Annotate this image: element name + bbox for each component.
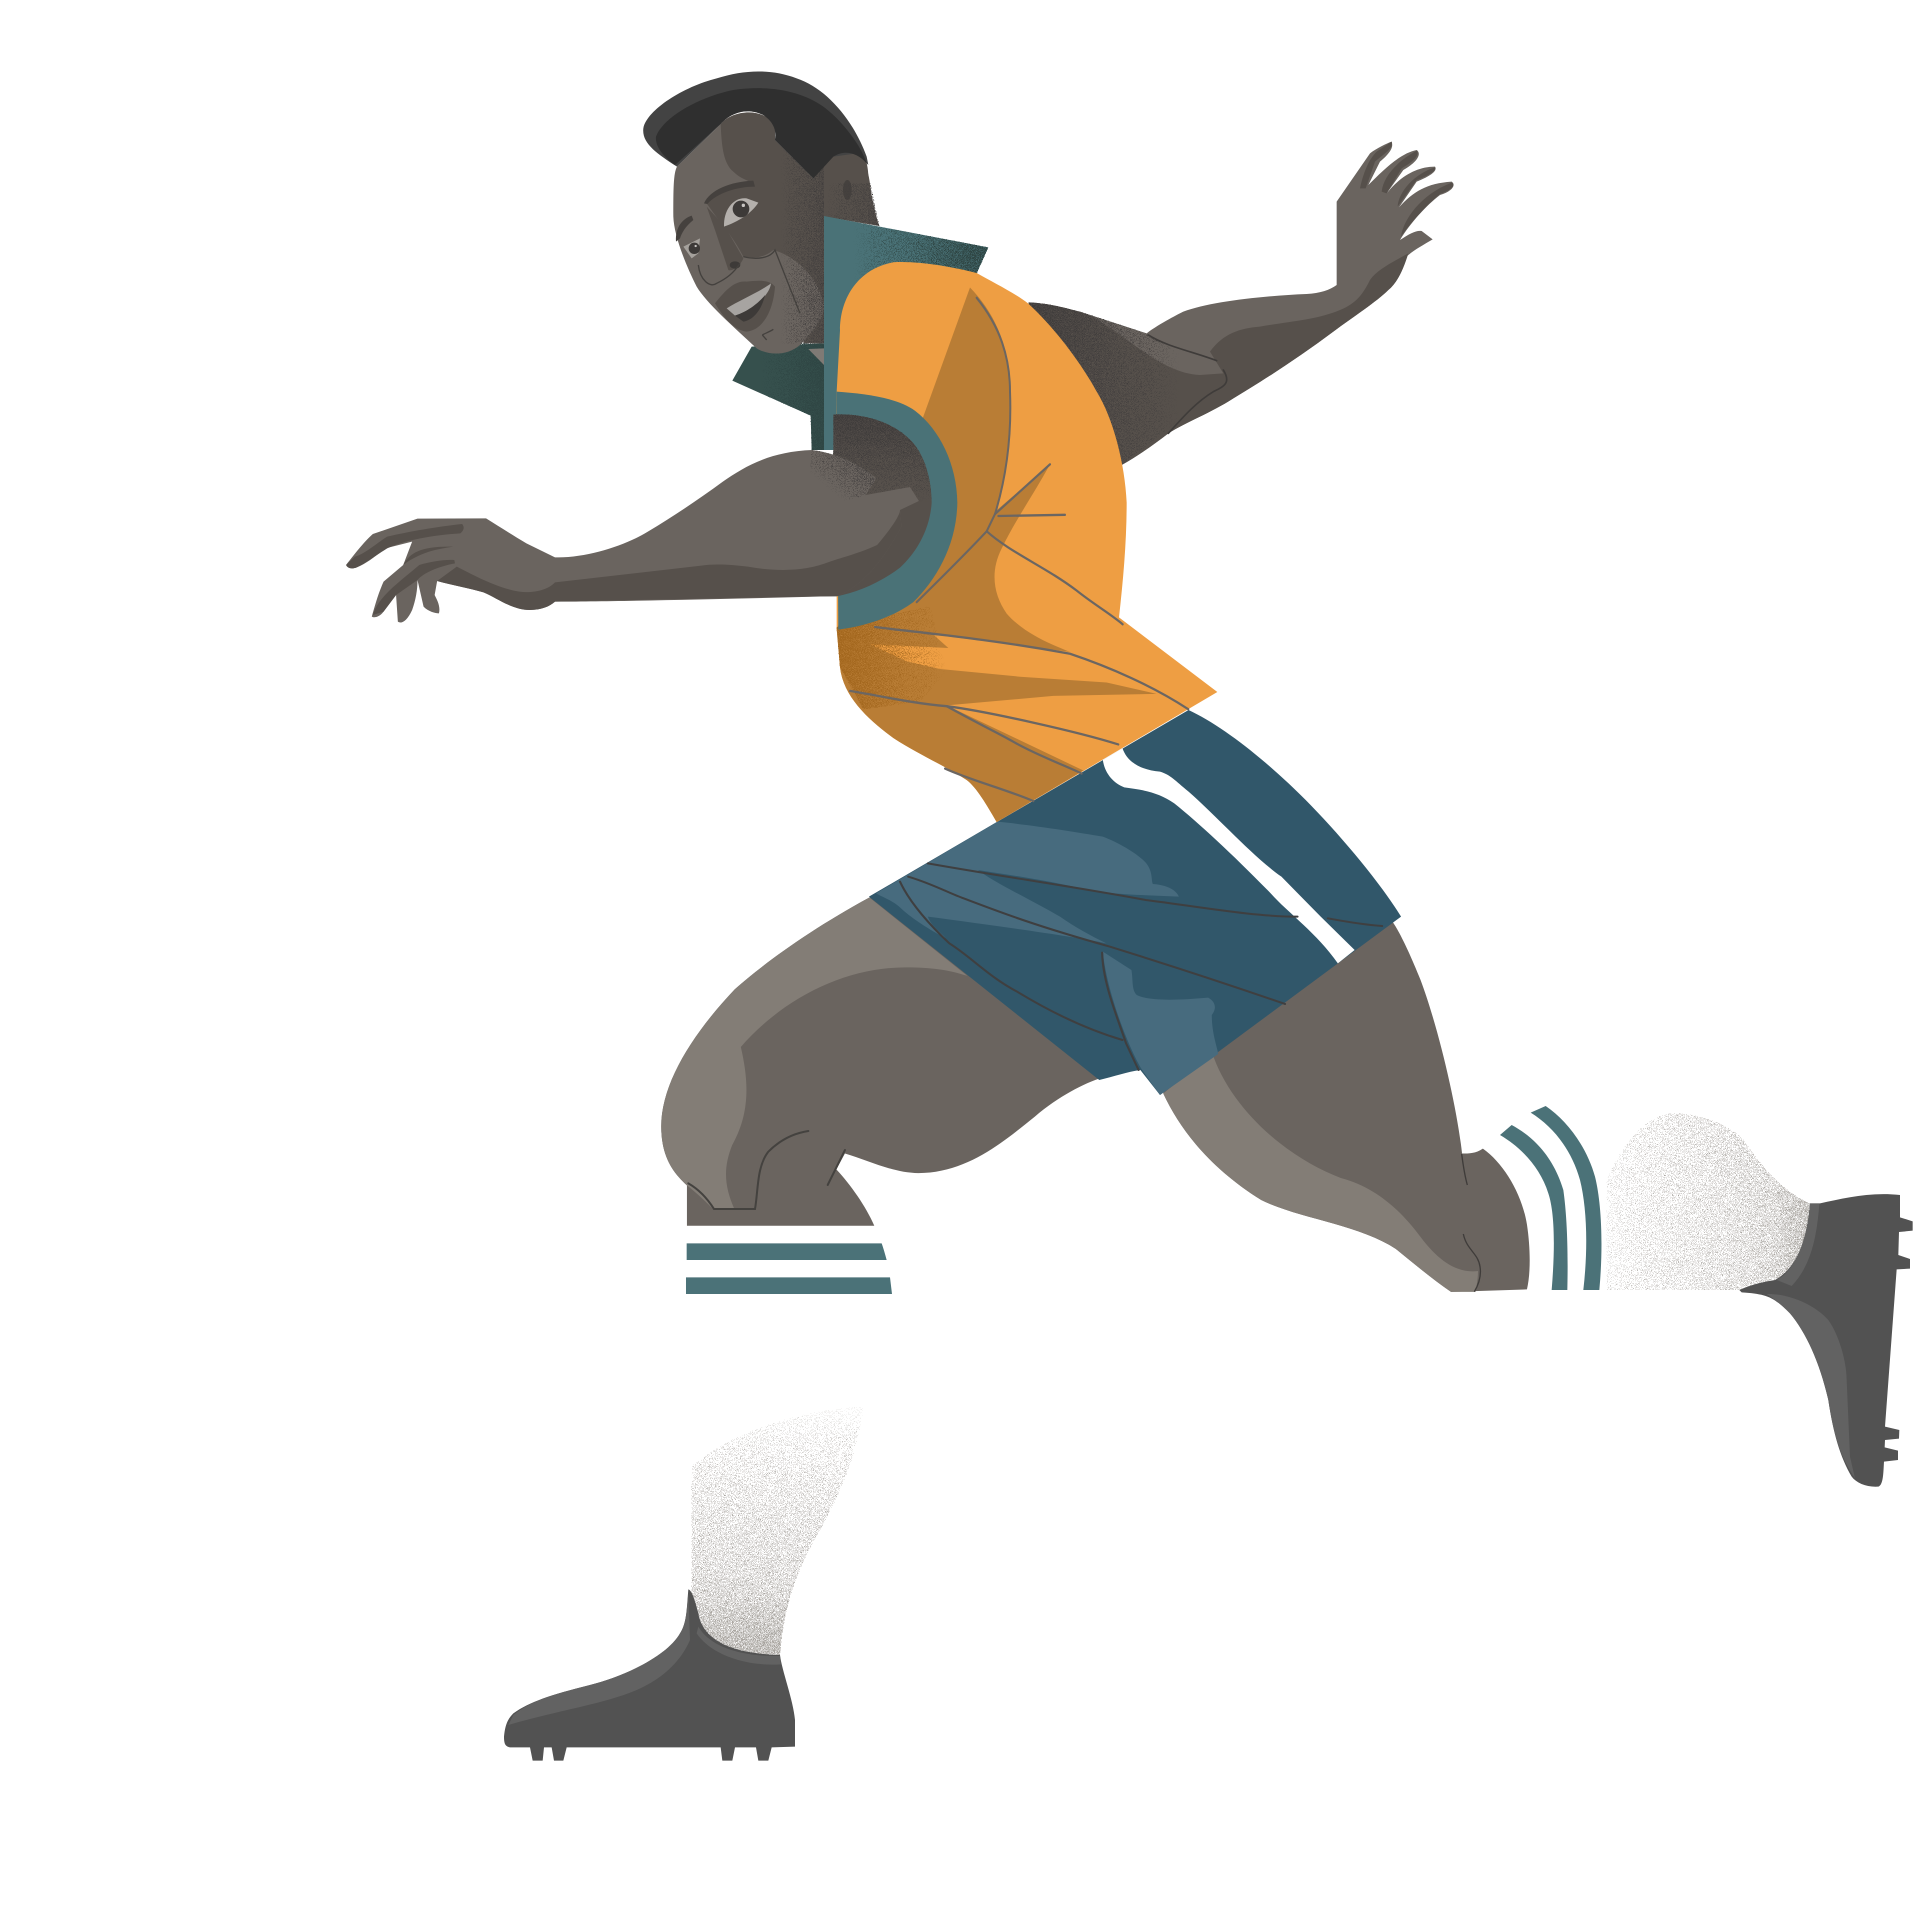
rear sock grain	[1607, 1113, 1810, 1290]
arm silhouette	[1029, 142, 1454, 487]
front sock grain	[692, 1407, 863, 1657]
left eye	[683, 238, 700, 258]
left arm reaching out	[346, 450, 919, 622]
jersey crease lines	[850, 298, 1188, 801]
neck and back of head	[803, 145, 879, 343]
teeth	[727, 283, 771, 316]
upright collar grain	[853, 222, 988, 303]
front boot highlights	[508, 1593, 781, 1725]
face	[673, 124, 824, 354]
cheek and neck grain	[780, 143, 824, 343]
left brow	[676, 216, 693, 242]
ear	[827, 152, 872, 207]
right brow	[704, 181, 755, 204]
jersey	[820, 262, 1217, 822]
shorts crease lines	[900, 863, 1382, 1070]
inner sleeve shadow	[820, 414, 932, 596]
finger shading	[346, 524, 464, 615]
front sock stripes	[686, 1243, 892, 1294]
shoulder grain	[1029, 302, 1180, 487]
front thigh	[661, 845, 1151, 1226]
shoulder grain	[809, 450, 876, 507]
sleeve crease lines	[1148, 335, 1227, 433]
head and collar	[643, 71, 988, 450]
lower collar flap	[732, 343, 824, 450]
finger shading	[1360, 142, 1453, 237]
rear sock stripes	[1500, 1106, 1601, 1290]
rear boot highlights	[1767, 1204, 1855, 1478]
front leg thigh and knee	[661, 845, 1151, 1226]
ear grain	[824, 183, 879, 226]
sleeve cuff	[837, 392, 957, 630]
mouth interior	[735, 295, 765, 322]
knee crease lines	[688, 1131, 845, 1209]
jersey shadow folds	[837, 288, 1157, 822]
rear thigh highlight	[1163, 1053, 1478, 1292]
face shadow	[707, 112, 824, 303]
front knee lines and sock stripes	[686, 1131, 892, 1294]
jersey base	[837, 262, 1217, 822]
nostril	[730, 261, 740, 269]
arm underside shadow	[437, 510, 901, 610]
ear detail	[843, 180, 852, 200]
shorts	[869, 710, 1401, 1095]
arm silhouette	[346, 450, 919, 622]
rear boot	[1739, 1194, 1913, 1487]
shorts base	[869, 710, 1401, 1095]
front boot	[504, 1589, 795, 1761]
hair outer	[643, 71, 868, 178]
shorts light folds	[876, 822, 1218, 1095]
right arm raised behind the body	[1029, 142, 1454, 487]
rear leg thigh and knee	[1163, 918, 1530, 1292]
nose shading	[707, 207, 743, 270]
front thigh highlight	[661, 898, 967, 1210]
neck light patch	[808, 348, 824, 365]
mouth area	[715, 281, 775, 332]
rear knee lines, sock stripes, grain and boot	[1462, 1106, 1913, 1487]
upright collar	[824, 216, 988, 450]
shorts white stripe	[1103, 748, 1355, 963]
jersey grain lower left	[837, 606, 947, 709]
right eye	[724, 198, 758, 227]
inner sleeve grain	[833, 414, 932, 503]
front sock grain and boot	[504, 1407, 863, 1761]
arm shadow	[1029, 253, 1408, 487]
hair inner	[656, 88, 867, 178]
rear thigh	[1163, 918, 1530, 1292]
knee crease lines	[1462, 1154, 1480, 1292]
lower collar grain	[760, 343, 824, 450]
face lines	[698, 250, 800, 340]
